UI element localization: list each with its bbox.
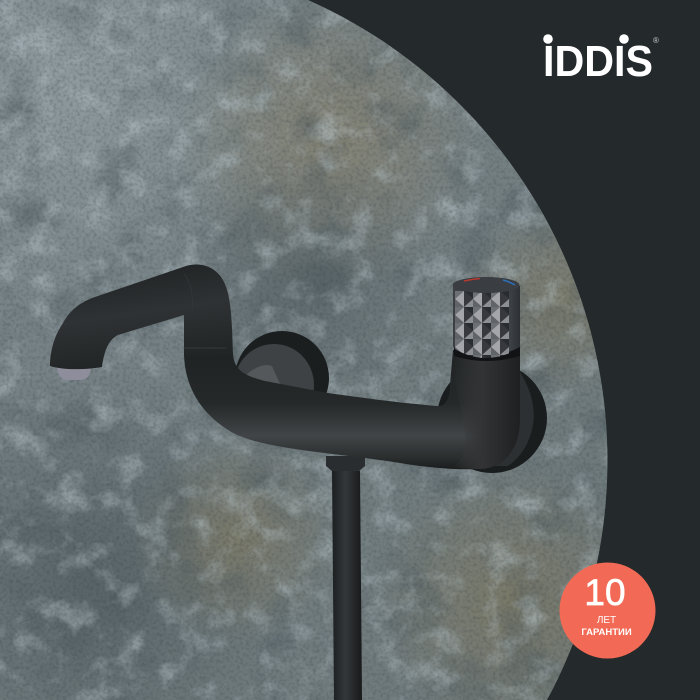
- aerator: [57, 366, 91, 380]
- badge caption line 1: ЛЕТ: [597, 615, 616, 626]
- faucet body: [184, 350, 520, 469]
- blue cold mark: [503, 280, 515, 285]
- hex nut: [247, 365, 281, 388]
- diamond facets: [455, 291, 509, 359]
- wall disc: left mount: [234, 331, 329, 426]
- badge number: 10: [584, 572, 626, 613]
- wall disc: right mount: [437, 363, 547, 473]
- spout: [50, 265, 233, 369]
- red hot mark: [464, 278, 480, 281]
- warranty badge: [560, 562, 656, 658]
- logo: IDDIS: [543, 38, 653, 86]
- hose: [326, 456, 365, 700]
- registered mark: ®: [653, 36, 659, 45]
- badge caption line 2: ГАРАНТИИ: [581, 627, 632, 638]
- handle cap: [452, 277, 520, 293]
- hose connector: [326, 456, 365, 472]
- logo dot left: [543, 34, 553, 44]
- riser highlight: [452, 352, 520, 469]
- handle collar: [454, 346, 520, 361]
- spout seam: [184, 274, 192, 310]
- logo dot right: [619, 34, 629, 44]
- faucet shadow on wall: [110, 290, 470, 445]
- diamond knurled handle: [452, 277, 520, 359]
